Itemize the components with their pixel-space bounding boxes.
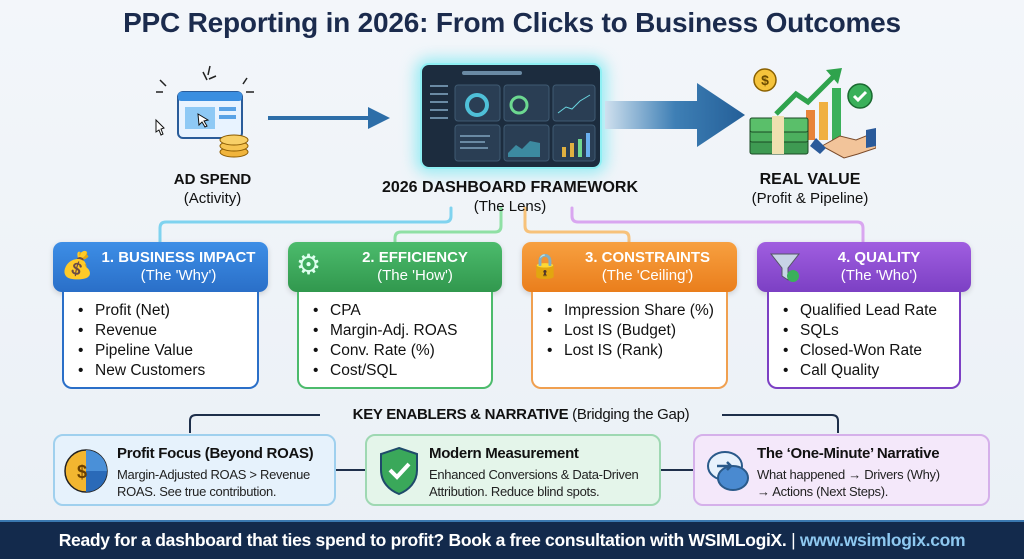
card: one-minute narrative: What happened → Drivers (Why) [757,467,940,482]
label: real value [752,171,868,207]
list: business impact: Revenue [95,322,157,339]
list: quality: Closed-Won Rate [800,342,922,359]
label: ad spend: AD SPEND [174,171,251,188]
icon: gear calculator: ⚙ [296,249,321,280]
label: ad spend [174,171,251,207]
label: real value: REAL VALUE [760,171,860,188]
panel: efficiency [286,242,504,389]
card: modern measurement: Enhanced Conversions & Data-Driven [429,467,638,482]
header: constraints: 3. CONSTRAINTS [585,249,710,266]
header: quality: 4. QUALITY [838,249,920,266]
header: quality [757,242,971,292]
card: one-minute narrative: The ‘One-Minute’ Narrative [757,445,939,462]
header: efficiency: (The 'How') [377,267,453,284]
header: quality: (The 'Who') [841,267,917,284]
title: PPC Reporting in 2026: From Clicks to Business Outcomes [123,7,901,38]
label: dashboard framework [382,179,638,215]
header: constraints: (The 'Ceiling') [602,267,693,284]
list: quality: Qualified Lead Rate [800,302,937,319]
icon: funnel [770,254,800,282]
panel: constraints [520,242,739,389]
card: modern measurement [365,434,661,506]
list: constraints: Lost IS (Rank) [564,342,663,359]
list: constraints: Lost IS (Budget) [564,322,676,339]
header: efficiency [288,242,502,292]
header: business impact: 1. BUSINESS IMPACT [102,249,255,266]
icon: real value [750,68,876,158]
icon: real value: $ [761,72,769,88]
card: one-minute narrative [693,434,990,506]
list: business impact: Profit (Net) [95,302,170,319]
list: business impact: Pipeline Value [95,342,193,359]
label: dashboard framework: 2026 DASHBOARD FRAMEWORK [382,179,638,196]
icon: money bag: 💰 [61,250,93,280]
header: efficiency: 2. EFFICIENCY [362,249,468,266]
list: constraints: Impression Share (%) [564,302,714,319]
panel: business impact [51,242,270,389]
list: business impact: New Customers [95,362,205,379]
list: business impact [62,292,259,389]
list: quality [767,292,961,389]
header: business impact [53,242,268,292]
list: efficiency: Margin-Adj. ROAS [330,322,457,339]
card: profit focus: Profit Focus (Beyond ROAS) [117,445,313,462]
header: constraints [522,242,737,292]
card: profit focus [53,434,336,506]
card: modern measurement: Attribution. Reduce blind spots. [429,484,599,499]
footer banner [0,520,1024,559]
list: efficiency [297,292,493,389]
panel: quality [755,242,973,389]
heading: key enablers: KEY ENABLERS & NARRATIVE (Bridging the Gap) [353,406,689,423]
icon: shield check [380,447,418,496]
arrow: big [605,83,745,147]
list: efficiency: Cost/SQL [330,362,397,379]
card: profit focus: ROAS. See true contribution. [117,484,276,499]
list: constraints [531,292,728,389]
list: efficiency: Conv. Rate (%) [330,342,435,359]
footer banner: Ready for a dashboard that ties spend to profit? Book a free consultation with WSIMLogiX. | www.wsimlogix.com [59,530,965,550]
label: ad spend: (Activity) [184,190,241,207]
icon: dashboard [420,63,602,169]
card: modern measurement: Modern Measurement [429,445,579,462]
header: business impact: (The 'Why') [141,267,216,284]
card: one-minute narrative: → Actions (Next Steps). [757,484,888,499]
label: real value: (Profit & Pipeline) [752,190,868,207]
label: dashboard framework: (The Lens) [474,198,546,215]
icon: coin chart: $ [77,462,87,482]
list: quality: SQLs [800,322,839,339]
list: efficiency: CPA [330,302,361,319]
icon: cloud lock: 🔒 [530,253,560,280]
icon: coin chart [64,449,108,493]
icon: chat bubbles [707,451,749,491]
list: quality: Call Quality [800,362,879,379]
icon: ad spend [156,66,254,158]
arrow: small [268,107,390,129]
card: profit focus: Margin-Adjusted ROAS > Revenue [117,467,310,482]
